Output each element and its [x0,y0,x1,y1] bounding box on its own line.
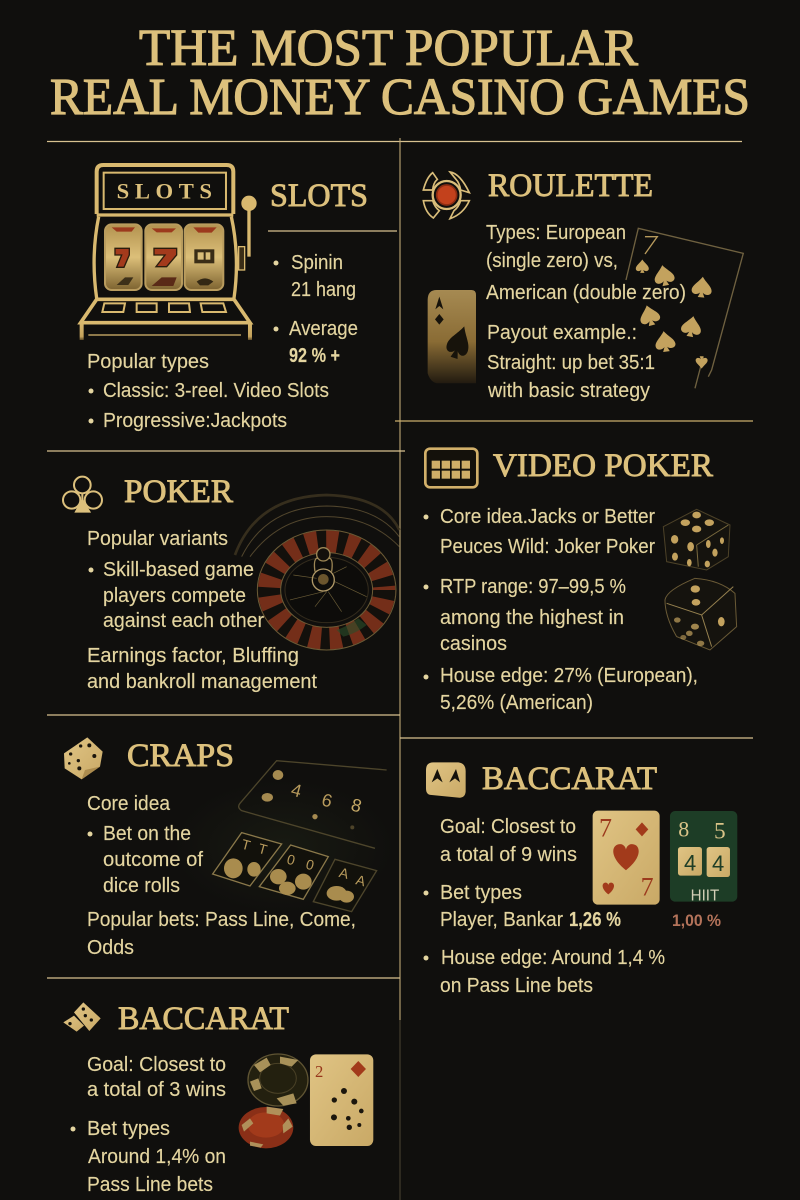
illustration: craps table [173,761,393,913]
text: house edge: on Pass Line bets [440,975,593,997]
text: spin facts: 92 % + [289,345,340,367]
text: house edge: House edge: Around 1,4 % [441,947,665,969]
text: goal [440,816,577,866]
text: core idea [424,506,655,558]
icon: two spades tile [426,762,466,798]
heading: baccarat: BACCARAT [118,1001,289,1037]
panel: craps [64,737,393,959]
text: popular types: Progressive:Jackpots [103,410,287,432]
text: bet types: Bet types [87,1118,170,1140]
heading: craps: CRAPS [127,738,234,774]
illustration: craps table: 0 [285,851,297,868]
text: types: American (double zero) [486,282,686,304]
text: popular types: Classic: 3-reel. Video Slots [103,380,329,402]
heading: video poker: VIDEO POKER [493,448,713,484]
text: goal: Goal: Closest to [440,816,576,838]
text: spin facts: Average [289,318,358,340]
illustration: craps table: 4 [289,780,304,801]
text: spin facts [274,252,358,367]
illustration: green score card [670,811,737,904]
illustration: seven of hearts card: 7 [641,873,654,902]
text: types: (single zero) vs, [486,250,618,272]
text: spin facts: Spinin [291,252,343,274]
text: rtp range: casinos [440,633,507,655]
panel: poker [63,474,399,693]
text: earnings: Earnings factor, Bluffing [87,645,299,667]
heading: baccarat: BACCARAT [482,761,657,797]
panel: baccarat left [63,1001,373,1196]
text: popular bets: Popular bets: Pass Line, Come, [87,909,356,931]
illustration: green score card: 4 [684,850,696,875]
text: earnings [87,645,317,693]
text: payout: Straight: up bet 35:1 [487,352,655,374]
text: popular bets: Odds [87,937,134,959]
text: goal: a total of 3 wins [87,1079,226,1101]
text: bet types: Pass Line bets [87,1174,213,1196]
illustration: green score card: 5 [714,818,726,844]
text: payout: with basic strategy [487,380,650,402]
text: bet types [70,1118,226,1196]
text: core idea: Bet on the [103,823,191,845]
text: rtp range: RTP range: 97–99,5 % [440,576,626,598]
illustration: casino chips [239,1054,308,1148]
icon: dominoes [63,1002,101,1032]
text: bet types: Player, Bankar [440,909,563,931]
text: goal: Goal: Closest to [87,1054,226,1076]
illustration: green score card: HIIT [691,887,720,904]
text: bet types: 1,26 % [569,909,621,931]
text: variants: Popular variants [87,528,228,550]
illustration: green score card: 8 [678,816,689,841]
panel: slots [81,165,368,432]
icon: club [63,477,102,512]
illustration: roulette wheel [235,495,399,650]
text: variants: players compete [103,585,246,607]
text: core idea: Core idea.Jacks or Better [440,506,655,528]
text: payout [487,322,655,402]
text: bet types: 1,00 % [672,911,721,930]
illustration: green score card: 4 [712,851,724,876]
text: house edge [424,947,665,997]
text: bet types [424,882,721,931]
text: popular types: Popular types [87,351,209,373]
icon: die [64,737,103,779]
illustration: two of diamonds card [310,1054,373,1146]
illustration: seven of spades card [626,228,743,388]
text: rtp range [424,576,626,655]
text: core idea: Peuces Wild: Joker Poker [440,536,655,558]
text: popular types [87,351,329,432]
panel: baccarat right [424,761,737,997]
illustration: seven of hearts card: 7 [599,814,612,843]
text: goal: a total of 9 wins [440,844,577,866]
illustration: seven of hearts card [593,811,660,905]
text: house edge [424,665,698,714]
text: variants [87,528,264,632]
illustration: ace card [428,290,476,383]
text: core idea [87,793,203,897]
text: house edge: 5,26% (American) [440,692,593,714]
text: core idea: Core idea [87,793,171,815]
text: core idea: dice rolls [103,875,180,897]
text: core idea: outcome of [103,849,203,871]
text: bet types: Around 1,4% on [88,1146,226,1168]
icon: video poker screen [425,449,477,487]
illustration: craps table: 6 [320,790,334,811]
panel: video poker [424,448,737,714]
text: spin facts: 21 hang [291,279,356,301]
title: REAL MONEY CASINO GAMES [50,69,750,126]
text: variants: Skill-based game [103,559,254,581]
heading: poker: POKER [124,474,233,510]
illustration: craps table: A [338,864,351,882]
heading: roulette: ROULETTE [488,168,653,204]
icon: slot machine [81,165,257,340]
illustration: craps table: 8 [349,795,364,816]
text: types [486,222,686,304]
icon: roulette emblem [423,172,469,219]
text: house edge: House edge: 27% (European), [440,665,698,687]
text: goal [87,1054,226,1101]
panel: roulette [423,168,743,402]
text: bet types: Bet types [440,882,522,904]
illustration: lower die [665,578,737,650]
text: types: Types: European [486,222,626,244]
text: variants: against each other [103,610,264,632]
text: rtp range: among the highest in [440,607,624,629]
icon: slot machine: SLOTS [117,179,212,204]
illustration: two of diamonds card: 2 [315,1062,323,1081]
illustration: craps table: 0 [304,856,316,873]
title [50,20,750,126]
heading: slots: SLOTS [270,178,368,214]
title: THE MOST POPULAR [139,20,638,77]
illustration: upper die [663,509,730,570]
text: popular bets [87,909,356,959]
illustration: craps table: A [354,871,368,889]
illustration: craps table: T [257,840,269,858]
text: earnings: and bankroll management [87,671,317,693]
illustration: craps table: T [240,836,253,854]
text: payout: Payout example.: [487,322,637,344]
